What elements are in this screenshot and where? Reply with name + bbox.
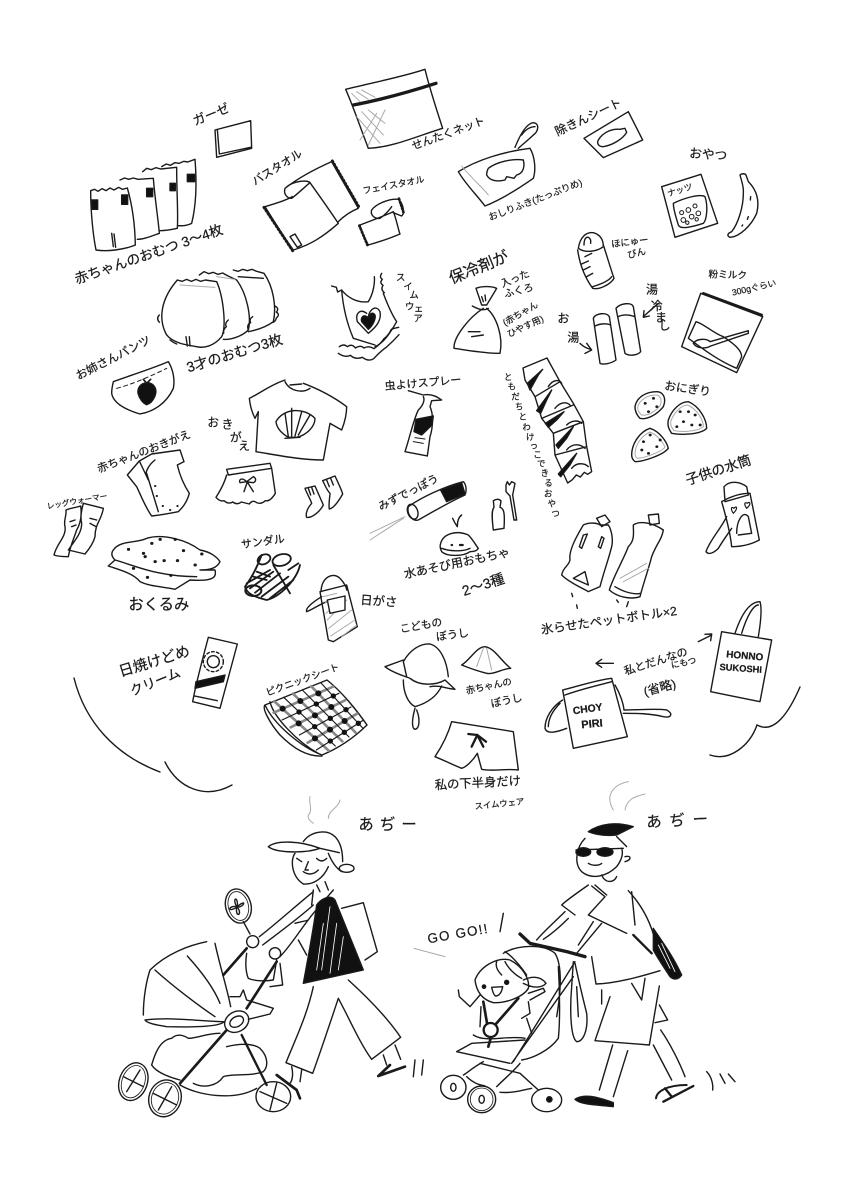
label: sandals: サンダル	[240, 531, 286, 551]
label: ice pack, line 1: 保冷剤が	[446, 247, 512, 288]
label: my and my husband's things, line 2: にもつ	[670, 655, 697, 670]
label: laundry net: せんたくネット	[410, 114, 487, 153]
icon: swim shorts	[435, 722, 518, 770]
label: water toys, line 2: 2〜3種	[460, 570, 506, 599]
label: antibacterial sheet: 除きんシート	[553, 96, 624, 139]
arrow: to shoulder bag	[596, 659, 613, 667]
icon: T-shirt with shell	[249, 380, 347, 460]
stroller wheels and undercarriage	[441, 1062, 562, 1113]
figure: father's sandals	[575, 1085, 693, 1107]
label: baby diapers: 赤ちゃんのおむつ 3〜4枚	[73, 222, 225, 287]
icon: leg warmers	[54, 503, 103, 557]
label: powdered milk: 粉ミルク	[708, 268, 747, 282]
icon: whale toy	[440, 515, 478, 555]
speech line	[414, 948, 445, 957]
label: bath towel: バスタオル	[250, 147, 305, 188]
label: 300g: 300gぐらい	[731, 278, 777, 298]
icon: baby bodysuit	[127, 450, 189, 516]
label: parasol: 日がさ	[360, 592, 398, 610]
stroller canopy	[143, 942, 273, 1027]
label: baby's hat, line 1: 赤ちゃんの	[465, 676, 513, 696]
label: swimwear for lower body only, line 1: 私の下半身だけ	[434, 773, 521, 792]
label: omitted: (省略)	[642, 676, 678, 699]
icon: parasol	[306, 575, 357, 642]
icon: tote bag: HONNO	[726, 649, 764, 664]
speech: GO GO: GO GO!!	[426, 921, 490, 946]
heat waves	[610, 782, 645, 810]
label: leg warmers: レッグウォーマー	[46, 490, 108, 511]
icon: shoulder bag	[545, 678, 671, 748]
label: sunscreen, line 1: 日焼けどめ	[117, 643, 192, 680]
illustration: father pushing stroller with child	[414, 782, 735, 1113]
label: ice pack, line 5: ひやす用)	[506, 314, 545, 339]
panel: clothes, sunscreen, picnic sheet (middle left)	[46, 380, 398, 756]
label: baby's hat, line 2: ぼうし	[490, 692, 524, 710]
stroller hanging bag	[246, 953, 283, 987]
icon: swimwear top	[332, 273, 399, 360]
label: ice pack, line 2: 入った	[499, 268, 531, 290]
icon: nuts bag: ナッツ	[666, 181, 694, 199]
label: bug spray: 虫よけスプレー	[384, 373, 462, 393]
label: snacks: おやつ	[689, 146, 728, 163]
icon: handheld fan	[222, 886, 255, 934]
icon: swaddle blanket	[108, 537, 220, 589]
icon: laundry net	[346, 69, 443, 148]
label: gauze: ガーゼ	[191, 101, 232, 128]
icon: banana	[728, 174, 758, 237]
icon: bug spray	[405, 391, 442, 456]
label: onigiri: おにぎり	[664, 378, 712, 399]
panel: wipes, snacks, milk (upper right)	[446, 96, 777, 373]
icon: powdered milk bag	[682, 293, 763, 373]
label: older sister's pants: お姉さんパンツ	[73, 333, 153, 383]
icon: wet wipes	[458, 123, 538, 206]
label: frozen bottles: 氷らせたペットボトル×2	[540, 604, 678, 637]
icon: toy fork	[506, 482, 517, 520]
label: baby's change of clothes: 赤ちゃんのおきがえ	[95, 427, 192, 475]
figure: mother's trousers and shoes	[277, 980, 423, 1098]
icon: snack strip	[523, 358, 592, 483]
speech marks	[500, 913, 503, 932]
icon: ice pack bag	[454, 287, 501, 353]
arrow: to tote bag	[698, 634, 712, 642]
icon: sunscreen tube	[193, 637, 237, 708]
icon: baby diapers	[91, 159, 196, 251]
panel: spray, snacks, bottles, hats, bags (middle right)	[370, 358, 772, 811]
icon: baby's hat	[462, 647, 511, 674]
label: child's water bottle: 子供の水筒	[683, 452, 753, 488]
icon: baby bottle	[578, 233, 614, 289]
stroller hanging bag	[571, 962, 587, 1042]
icon: face towel	[359, 199, 404, 246]
figure: mother's white tote	[342, 903, 377, 960]
icon: shoulder bag: PIRI	[581, 718, 603, 731]
label: my and my husband's things, line 1: 私とだんなの	[623, 645, 689, 678]
figure: father's shirt and arms	[537, 885, 660, 984]
label: baby bottle: ほにゅー	[611, 235, 649, 249]
decoration: left thought-cloud outline	[74, 678, 232, 792]
speech: so hot: あぢー	[646, 811, 708, 831]
label: swaddle blanket: おくるみ	[128, 596, 189, 613]
icon: small bottle	[492, 499, 504, 530]
label: swimwear for lower body only, line 2: スイムウェア	[474, 796, 525, 811]
decoration: right thought-cloud outline	[710, 687, 800, 757]
arrow: to hot water	[580, 343, 592, 353]
icon: onigiri	[632, 392, 707, 462]
icon: tote bag: SUKOSHI	[719, 662, 762, 675]
icon: frozen square bottle	[562, 515, 612, 608]
icon: antibacterial sheet	[584, 112, 643, 158]
label: sunscreen, line 2: クリーム	[128, 665, 183, 699]
panel: towels, diapers, laundry net (upper left)	[73, 69, 487, 414]
icon: child's water bottle	[706, 482, 759, 553]
icon: picnic sheet	[264, 680, 367, 756]
icon: tote bag	[711, 602, 772, 702]
icon: shoulder bag: CHOY	[572, 702, 603, 717]
label: picnic sheet: ピクニックシート	[265, 662, 341, 699]
label: change of clothes: おきがえ	[207, 417, 250, 453]
speech: so hot: あぢー	[358, 816, 417, 833]
icon: frozen round bottle	[609, 514, 663, 607]
icon: child's hat	[385, 644, 455, 729]
label: water pistol: みずでっぽう	[376, 472, 441, 513]
stroller handle and canopy	[503, 934, 585, 1063]
label: wet wipes: おしりふき(たっぷりめ)	[487, 178, 584, 223]
icon: water pistol	[370, 482, 466, 540]
motion lines	[707, 1072, 735, 1090]
label: ice pack, line 3: ふくろ	[503, 281, 535, 300]
stroller wheels	[114, 1059, 291, 1121]
figure: father's shorts and legs	[595, 978, 685, 1097]
figure: child in stroller	[457, 959, 546, 1063]
label: face towel: フェイスタオル	[362, 174, 425, 196]
icon: three-year-old diapers	[158, 269, 278, 347]
heat waves	[308, 797, 340, 823]
label: ice pack, line 4: (赤ちゃん	[501, 300, 540, 328]
label: hot water: お湯	[557, 312, 579, 345]
icon: bath towel	[264, 161, 360, 251]
label: child's hat, line 2: ぼうし	[435, 626, 470, 644]
label: snacks to share with friends: ともだちとわけっこできるおやつ	[504, 372, 560, 519]
label: three-year-old diapers: 3才のおむつ3枚	[185, 331, 284, 375]
arrow: to cooled water	[643, 303, 658, 317]
label: swimwear: スイムウェア	[396, 273, 423, 324]
icon: gauze	[215, 121, 252, 157]
icon: strawberry pants	[112, 362, 174, 414]
icon: sandals	[245, 552, 300, 600]
figure: mother's head	[268, 832, 354, 892]
icon: socks	[305, 476, 343, 517]
figure: mother's arms	[259, 890, 333, 957]
stroller basket contents	[152, 1033, 267, 1096]
icon: cooled water bottle	[616, 304, 641, 355]
stroller frame	[180, 936, 281, 1085]
icon: nuts bag	[662, 174, 718, 237]
figure: father's head	[576, 824, 633, 881]
label: cooled boiled water: 湯冷まし	[646, 282, 671, 332]
icon: skirt	[216, 463, 275, 504]
illustration: mother pushing stroller	[114, 797, 423, 1121]
label: water toys, line 1: 水あそび用おもちゃ	[403, 545, 511, 581]
label: child's hat, line 1: こどもの	[399, 616, 443, 636]
figure: father's sling bag	[633, 928, 682, 979]
icon: hot water bottle	[593, 314, 616, 364]
label: baby bottle, line 2: びん	[626, 246, 647, 260]
figure: mother's black top	[303, 897, 363, 983]
